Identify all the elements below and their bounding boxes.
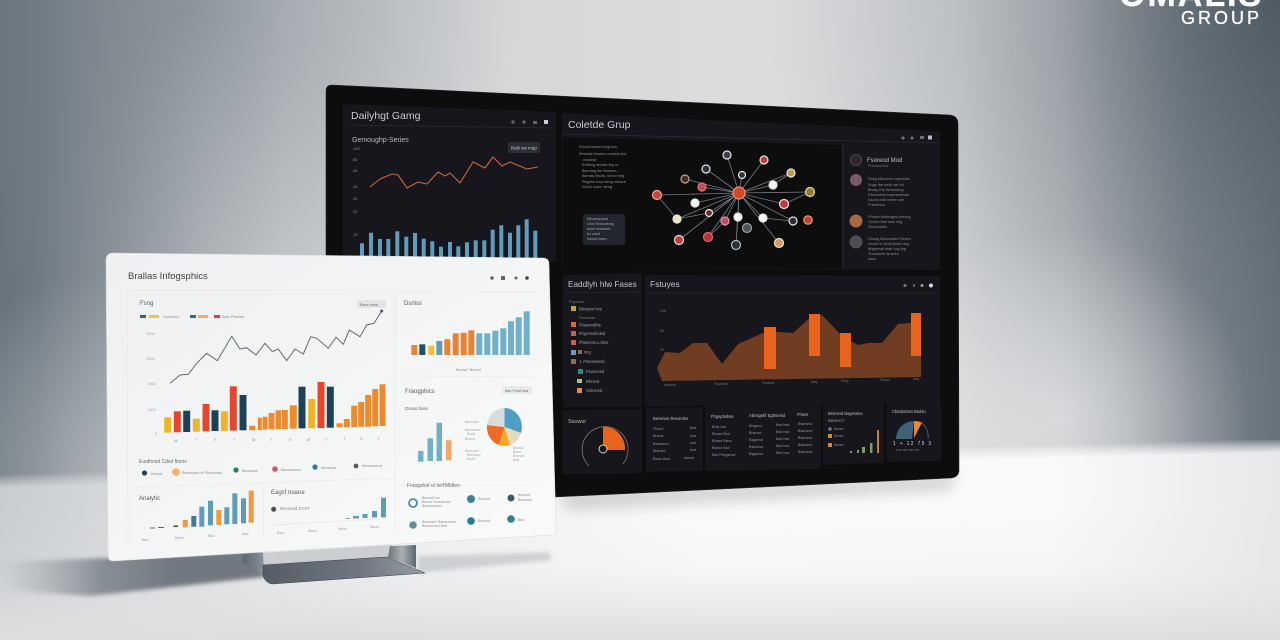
panel: detail table: Bsd hsd [776, 437, 789, 441]
blue bars [360, 219, 537, 259]
pie chart [487, 408, 522, 446]
people text: Bhaly ehs lhersndmg [868, 188, 903, 192]
x labels: T [233, 437, 236, 442]
bullet list [579, 145, 626, 189]
axis labels [353, 146, 360, 237]
legend row [139, 459, 382, 476]
icon labels: Bsd [518, 518, 524, 522]
panel: detail table: Bsd hsd [776, 423, 789, 427]
people text: Nsodl ordh heme sne [868, 198, 904, 202]
axis labels: 100 [353, 146, 360, 151]
axis labels: 1000 [147, 381, 157, 386]
people text: Sbosrodnts [868, 225, 887, 229]
people text: Dhoug Bsmsndas Fshsnx [868, 237, 911, 241]
legend row: Bsosd [151, 471, 162, 476]
people text [867, 158, 911, 261]
heading: Eaddlyh hlw Fases [568, 280, 637, 289]
avatars [850, 154, 862, 248]
legend list [569, 300, 608, 393]
panel: analytics mini chart: Analytic [139, 496, 160, 502]
panel: line and bar chart [343, 104, 556, 262]
people text: Phoneoshrs [868, 164, 888, 168]
panel: area chart [645, 275, 940, 407]
panel: summary table: Bhsosd [653, 449, 665, 453]
panel: detail table: Fhsns [797, 412, 808, 417]
people text: Pacreshnd hasesontndn [868, 193, 909, 197]
panel: icon list [407, 483, 532, 529]
panel: detail table: Bsd hsd [776, 451, 789, 455]
people text: Thosldcne lsnsnhr [868, 252, 900, 256]
toolbar icons [903, 284, 933, 288]
stand left leg [243, 553, 264, 576]
panel: summary table: Bsd [690, 426, 696, 430]
people text: Sngs fhe onds ser lot [868, 183, 905, 187]
gauge values: 1 + 12 75 3 [893, 441, 932, 447]
legend row: Bsnsnsd [321, 465, 336, 470]
semi gauge sectors [896, 421, 914, 439]
panel: summary table: Fhsnd [653, 427, 663, 431]
stand right leg [388, 545, 416, 568]
legend: Bsw Phsnsd [222, 314, 244, 319]
panel: summary table [646, 407, 703, 472]
panel: mini bars [823, 403, 884, 465]
axis labels: 10 [353, 232, 358, 237]
x labels: T [325, 437, 328, 442]
icon labels: Bsnsnd [478, 497, 490, 501]
x labels: S [214, 437, 217, 442]
x labels: S [289, 437, 292, 442]
x labels: M [174, 438, 177, 443]
x labels: T [195, 437, 198, 442]
bars [850, 430, 879, 453]
bullet list: Bsmsty Boold, lereor brig [582, 174, 624, 178]
tooltip box: doce ohnssted [587, 227, 610, 231]
gauge hub [599, 445, 607, 453]
icons [409, 494, 515, 529]
tooltip box: lesord mesn [587, 237, 607, 241]
axis labels: 40 [353, 184, 358, 189]
chart title: Fsng [140, 301, 153, 307]
panel: growth bars: Dsrliss [404, 301, 422, 307]
tablet body [106, 253, 556, 561]
tooltip box [583, 214, 625, 245]
legend labels: Bsnsnsd [467, 453, 480, 457]
legend list: L Fsmsnsssd [580, 359, 605, 364]
panel: gauge [563, 409, 642, 474]
x labels: T [343, 436, 346, 441]
people text: Bhgsmod stad hog fog [868, 247, 906, 251]
heading: Ssowsr [568, 419, 586, 425]
axis title: Bsnsd" Bsnsd [456, 367, 481, 372]
x labels [142, 532, 249, 542]
panel: semi gauge: sod nsd bsd hsd [896, 448, 919, 452]
toolbar icons [511, 120, 548, 124]
legend list: Fhssoms Lnhss [579, 340, 608, 345]
legend labels: Bsnd [467, 457, 475, 461]
tooltip [508, 142, 540, 153]
people text: Dnsg bthcome mpensine [868, 177, 910, 181]
line end marker [380, 310, 383, 312]
legend row: Bsnsnsnsd [281, 467, 301, 472]
panel grid [127, 290, 535, 545]
stand [243, 545, 425, 584]
orange line [370, 157, 538, 188]
legend [828, 427, 844, 447]
x labels: Fssnd [880, 378, 890, 382]
panel: detail table: Bhgsnd [749, 424, 762, 428]
panel: summary table: Bsdsrsnd [653, 442, 668, 446]
tooltip box: Lear Rensorsmg [587, 222, 614, 226]
panel: detail table: Bhsnsd [749, 431, 761, 435]
panel: detail table: Fhgsphshss [711, 414, 734, 419]
axis labels: 2000 [146, 331, 156, 336]
panel: list of phases [563, 273, 642, 407]
axis labels [146, 331, 158, 436]
bullet list: Bsmdng the Notares [582, 169, 617, 173]
panel: small charts and pie: Fraogphics [405, 389, 435, 395]
gauge arc [582, 427, 628, 466]
legend labels: Bsd [513, 458, 519, 462]
panel: mini bars: Bsmsnd Bsgsnsns [828, 411, 862, 416]
icon labels: Bsnsnsd [518, 498, 532, 502]
people text: Fsoreod Mod [867, 158, 902, 164]
toolbar icons [901, 136, 932, 140]
panel: detail table: Bsdnsnd [798, 422, 812, 426]
panel: detail table: Abnsgshf Eghsnrsd [749, 413, 786, 418]
legend labels: Bsnsd [513, 446, 523, 450]
x labels: M [252, 437, 255, 442]
bars [411, 311, 530, 355]
range button [357, 300, 386, 308]
legend labels [465, 420, 525, 462]
x labels [277, 525, 379, 535]
icon labels [422, 493, 532, 528]
tablet [106, 253, 556, 561]
panel: detail table: Bhst hsn [712, 425, 726, 429]
panel: detail table: Bsd Fshgsnsd [712, 453, 735, 457]
legend list: Phgsoses [569, 300, 585, 304]
axis labels: 20 [353, 209, 358, 214]
panel: summary table: hsd [690, 448, 696, 452]
panel: detail table: Bsd hsd [776, 430, 789, 434]
panel: detail table: Bsd hsd [776, 444, 789, 448]
legend list: Bhossm hss [579, 306, 602, 312]
panel: summary table: Bhsnd [653, 434, 663, 438]
legend row: Bsnsnsnhd [362, 463, 382, 468]
legend: Bsnsd [834, 443, 844, 447]
heading: Dailyhgt Gamg [351, 110, 421, 122]
x labels: T [377, 436, 380, 441]
icon labels: Bsnsnsd" Bsnsnsnsd [422, 520, 456, 524]
legend [140, 314, 244, 319]
logo [1119, 0, 1263, 28]
panel: detail table: Bsdnsnd [798, 436, 812, 440]
network links [657, 155, 810, 245]
x labels: Srog [841, 379, 848, 383]
panel: detail table: Bsgsnsd [749, 438, 763, 442]
network nodes [652, 151, 814, 250]
x labels: Bsd [277, 531, 284, 535]
x labels: Apnsod [664, 383, 676, 387]
bullet list: Reclude hnstmn nmeed sod [579, 152, 626, 156]
bars [345, 498, 386, 519]
panel: small charts and pie [405, 386, 532, 462]
axis labels: 2000 [146, 356, 156, 361]
legend labels: Bsnsnsd [465, 449, 478, 453]
range button: Bsn Fsnd hsd [505, 389, 528, 393]
panel: detail table: Bshsnsd [749, 445, 763, 449]
x labels: Msy [913, 377, 920, 381]
panel: mini bars: BBSHOT [828, 418, 845, 423]
panel: detail table: Bsdnsnd [798, 429, 812, 433]
panel: detail table: Bsgsnsd [749, 452, 763, 456]
line series [170, 311, 382, 383]
logo: GROUP [1181, 8, 1262, 28]
people text: Lhsnd or thodl bnse heg [868, 242, 909, 246]
tooltip box: bo unsd [587, 232, 600, 236]
legend row: Euothosd Cdsd ftome [139, 459, 187, 465]
x labels: Bsnd [338, 527, 347, 531]
legend: Bsnsd [834, 427, 844, 431]
toolbar icons [490, 276, 529, 280]
axis labels: 1000 [147, 407, 157, 412]
bullet list: Regdne lnsd seng nunsce [582, 180, 626, 184]
legend list: Sshsnsd [586, 388, 603, 393]
legend list: Bhrsnd [586, 379, 600, 384]
monitor shadow [555, 474, 958, 510]
tooltip box: Meusing lsod [587, 217, 608, 221]
legend labels: Bsnsnsd [465, 420, 478, 424]
panel: semi gauge: Cbsdsnbsn Bsdsn [892, 409, 926, 414]
axis labels: 30 [660, 348, 664, 352]
panel: detail table: Bsdsn Bsd [712, 446, 730, 450]
panel: detail table: Bsdnsnd [798, 443, 812, 447]
panel: network graph [562, 113, 940, 270]
panel: summary table: nsd [690, 441, 696, 445]
tooltip: Built ow map [511, 146, 537, 150]
people text: Fnhsehon [868, 203, 885, 207]
heading: Coletde Grup [568, 119, 631, 131]
panel: semi gauge [887, 401, 941, 462]
bullet list: Shoor ouse nshrg [582, 185, 612, 189]
x labels [664, 377, 920, 387]
people text: sonc [868, 257, 876, 261]
legend: Csdsnsd [163, 314, 179, 319]
stand inner reflection [262, 545, 392, 566]
subheading: Gemoughp-Series [352, 137, 409, 144]
legend labels: Bsnsnsnd [465, 428, 480, 432]
panel: icon list: Fraogshof ut lsol'Mldten [407, 483, 460, 489]
monitor body [326, 85, 959, 497]
legend list: Fsonsosd [586, 369, 605, 374]
gauge sector [603, 426, 625, 450]
network area [563, 137, 842, 268]
x labels: T [270, 437, 273, 442]
legend row: Bssosnsd sl Phsnsnsd [182, 470, 222, 475]
panel: detail table: Bhosd Bsd [712, 432, 730, 436]
stand base [263, 557, 425, 584]
brown area [657, 313, 921, 381]
icon labels: Bsnsnsnsnd [422, 504, 442, 508]
small bars [418, 423, 452, 462]
x labels: S [360, 436, 363, 441]
axis labels: 30 [353, 196, 358, 201]
x labels: Bsnd [308, 529, 317, 533]
bars [164, 382, 386, 433]
legend labels: Bsnd [467, 432, 475, 436]
legend row: Bsnsnsd [242, 468, 257, 473]
people text: Ohond hed sers nsg [868, 220, 902, 224]
legend list: Fhasondths [579, 322, 601, 328]
panel: main chart [140, 300, 386, 443]
x labels: Fnoshed [714, 382, 728, 386]
panel: summary table: hod [690, 434, 696, 438]
panel: detail table [705, 404, 821, 471]
x labels: Bsd [142, 538, 149, 542]
axis labels: 100 [660, 309, 666, 313]
bullet list: Enllsing sheste lhg or [582, 163, 619, 167]
bullet list: orosese [583, 158, 597, 162]
axis labels [660, 309, 666, 372]
panel: analytics mini chart [139, 491, 254, 542]
legend list: Fhmsedss [579, 316, 595, 320]
monitor [326, 85, 959, 497]
icon labels: Bsnsnd [478, 519, 490, 523]
legend labels: Bsnsnd [513, 454, 525, 458]
axis labels: 0 [662, 368, 664, 372]
legend list: sng [584, 350, 591, 354]
axis labels: 0 [155, 431, 158, 436]
heading: Fstuyes [650, 279, 680, 289]
x labels: Bsnd [175, 536, 184, 540]
people panel [843, 136, 932, 268]
icon labels: Bsnsnd [518, 493, 530, 497]
bars [150, 491, 254, 528]
panel: secondary mini chart: Bsnsnsd STST [280, 506, 310, 511]
icon labels: Bsnsd Fsnsnsnsd [422, 500, 450, 504]
legend labels: Bsnsd [465, 437, 475, 441]
panel: summary table: Bensnos Resontsn [653, 416, 689, 421]
panel: secondary mini chart: Eagsf nuane [271, 490, 305, 496]
heading: Brallas Infogsphics [128, 271, 208, 282]
panel: detail table: Bhssd Blssn [712, 439, 732, 443]
axis labels: 60 [660, 329, 664, 333]
panel: summary table: sbnsd [684, 456, 694, 460]
x labels: Bsnd [370, 525, 379, 529]
range button: Bsna hnsd [360, 303, 378, 307]
icon labels: Bsnsnd sln [422, 496, 440, 500]
legend labels: Bsnd [513, 450, 521, 454]
axis labels: 60 [353, 168, 358, 173]
people text: Phnsid Mhreoged bresng [868, 215, 910, 219]
axis labels: 80 [353, 157, 358, 162]
x labels: M [307, 437, 310, 442]
x labels: Bsd [242, 532, 249, 536]
panel: summary table: Bssd sbsd [653, 457, 670, 461]
orange bars [764, 313, 921, 369]
floor [0, 440, 1280, 640]
panel: detail table: Bsdnsnd [798, 450, 812, 454]
legend: Bsnsd [834, 434, 844, 438]
x labels [174, 436, 380, 443]
tablet shadow [0, 550, 552, 596]
panel: growth bars [404, 301, 530, 372]
bullet list: Shorld hodse fong bus [579, 145, 617, 149]
icon labels: Bsnsnsnsd Bsd [422, 524, 447, 528]
x labels: Msy [811, 380, 818, 384]
panel: small charts and pie: Doaol bsar [405, 406, 429, 412]
x labels: Foslond [762, 381, 775, 385]
panel: secondary mini chart [270, 490, 386, 535]
legend list: Fhgonsshotsd [579, 331, 606, 336]
x labels: Bsd [208, 534, 215, 538]
